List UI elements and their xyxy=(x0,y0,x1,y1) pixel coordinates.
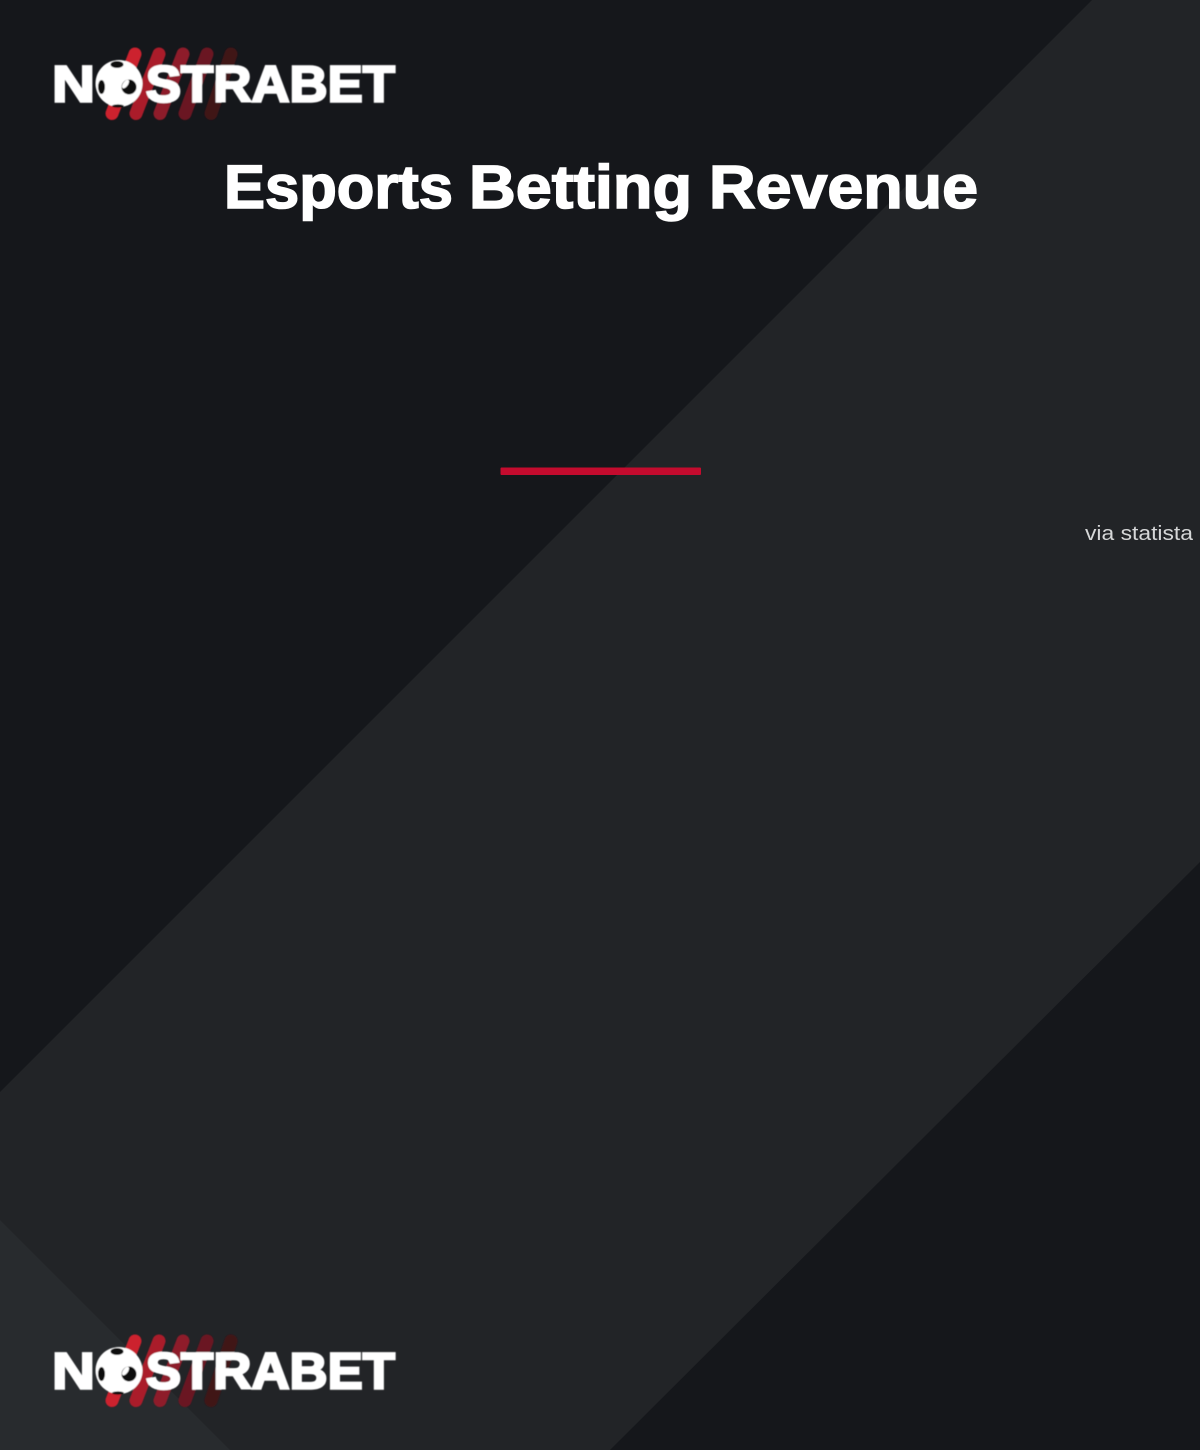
icon: soccer ball xyxy=(96,1347,142,1395)
title xyxy=(224,153,978,221)
logo wordmark: N xyxy=(52,56,95,112)
red divider xyxy=(500,468,701,475)
logo wordmark: N xyxy=(52,1342,95,1400)
lower-left lighter triangle xyxy=(0,1220,230,1450)
title: Esports xyxy=(224,153,453,221)
logo stripes xyxy=(112,54,231,114)
logo: bottom xyxy=(52,1341,395,1400)
logo wordmark: STRABET xyxy=(146,1342,395,1400)
logo: top xyxy=(52,54,395,114)
logo wordmark: STRABET xyxy=(146,56,395,112)
title: Revenue xyxy=(709,153,978,221)
source note: via statista xyxy=(1085,523,1194,545)
icon: soccer ball xyxy=(96,60,142,108)
logo stripes xyxy=(112,1341,231,1400)
title: Betting xyxy=(469,153,692,221)
